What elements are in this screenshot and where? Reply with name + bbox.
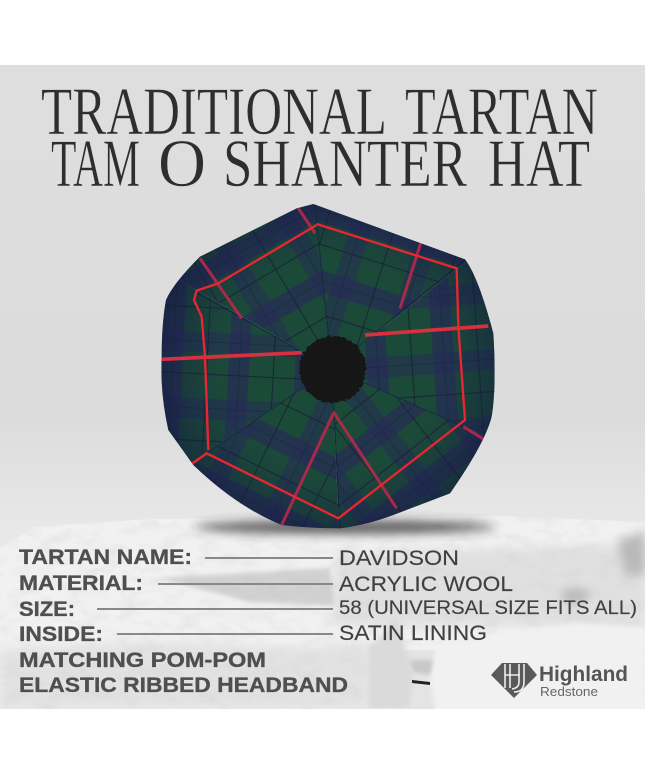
icon: logo diamond xyxy=(491,663,537,698)
spec: tartan name: DAVIDSON xyxy=(339,547,459,570)
spec: size: SIZE: xyxy=(19,598,75,621)
spec: tartan name xyxy=(19,546,459,570)
spec: material: ACRYLIC WOOL xyxy=(339,573,513,596)
spec: size xyxy=(19,598,637,621)
logo: Highland Redstone: Highland xyxy=(539,663,628,686)
logo: Highland Redstone: Redstone xyxy=(540,684,598,699)
title: SHANTER xyxy=(223,125,467,201)
title: TRADITIONAL xyxy=(41,73,387,149)
feature: matching pom-pom: MATCHING POM-POM xyxy=(19,649,266,672)
tartan hat xyxy=(161,204,495,528)
spec: size: 58 (UNIVERSAL SIZE FITS ALL) xyxy=(339,598,637,619)
spec: inside xyxy=(19,622,487,646)
stone plinth xyxy=(0,515,645,715)
title xyxy=(41,73,598,201)
feature: elastic ribbed headband: ELASTIC RIBBED HEADBAND xyxy=(19,674,348,697)
logo: Highland Redstone xyxy=(491,663,628,699)
title: O xyxy=(158,125,206,201)
title: TAM xyxy=(51,125,140,201)
hat shadow xyxy=(195,520,495,534)
icon: pom-pom xyxy=(299,336,366,403)
spec: tartan name: TARTAN NAME: xyxy=(19,546,192,569)
specification list xyxy=(19,546,637,697)
spec: material xyxy=(19,572,513,596)
title: HAT xyxy=(488,125,590,201)
spec: inside: SATIN LINING xyxy=(339,622,487,645)
spec: inside: INSIDE: xyxy=(19,623,103,646)
spec: material: MATERIAL: xyxy=(19,572,143,595)
